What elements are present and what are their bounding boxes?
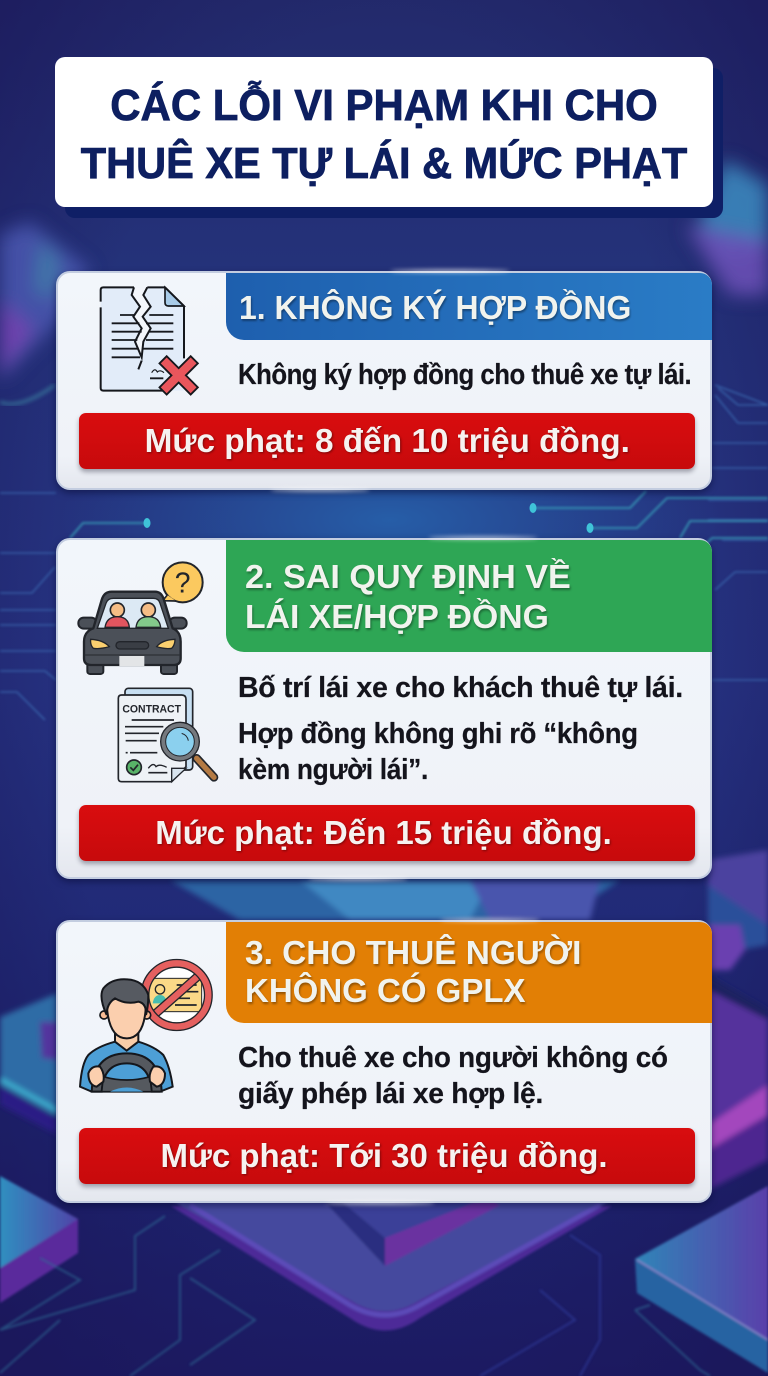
description 2b (238, 718, 638, 786)
fine 3 (79, 1128, 695, 1184)
icon: contract with magnifier (118, 688, 218, 784)
panel: violation 1 (56, 271, 712, 490)
icon: car with question bubble (77, 561, 204, 675)
fine 2 (79, 805, 695, 861)
heading 2: 2. SAI QUY ĐỊNH VỀ (245, 558, 571, 595)
fine 2: Mức phạt: Đến 15 triệu đồng. (155, 814, 612, 851)
title text: CÁC LỖI VI PHẠM KHI CHO (110, 81, 658, 130)
heading 3 (226, 922, 712, 1023)
description 3: Cho thuê xe cho người không có (238, 1042, 668, 1074)
title panel (55, 57, 713, 207)
heading 1: 1. KHÔNG KÝ HỢP ĐỒNG (239, 289, 631, 326)
fine 1: Mức phạt: 8 đến 10 triệu đồng. (144, 422, 630, 459)
title text: THUÊ XE TỰ LÁI & MỨC PHẠT (81, 139, 687, 188)
icon: contract with magnifier: CONTRACT (122, 703, 181, 715)
description 3: giấy phép lái xe hợp lệ. (238, 1078, 543, 1110)
heading 1 (226, 273, 712, 340)
heading 3: KHÔNG CÓ GPLX (245, 972, 526, 1009)
panel: violation 3 (56, 920, 712, 1203)
description 3 (238, 1042, 668, 1110)
heading 2 (226, 540, 712, 652)
panel: violation 2 (56, 538, 712, 879)
fine 3: Mức phạt: Tới 30 triệu đồng. (160, 1137, 608, 1174)
icon: car with question bubble: ? (175, 568, 191, 600)
description 2a: Bố trí lái xe cho khách thuê tự lái. (238, 672, 683, 704)
icon: torn contract with red x (100, 286, 200, 396)
heading 2: LÁI XE/HỢP ĐỒNG (245, 598, 549, 635)
description 2b: kèm người lái”. (238, 754, 428, 786)
heading 3: 3. CHO THUÊ NGƯỜI (245, 934, 581, 971)
icon: driver with prohibited licence (78, 958, 213, 1093)
description 2b: Hợp đồng không ghi rõ “không (238, 718, 638, 750)
title text (80, 80, 688, 188)
bottom chip (171, 1206, 612, 1330)
description 1: Không ký hợp đồng cho thuê xe tự lái. (238, 359, 691, 391)
fine 1 (79, 413, 695, 469)
